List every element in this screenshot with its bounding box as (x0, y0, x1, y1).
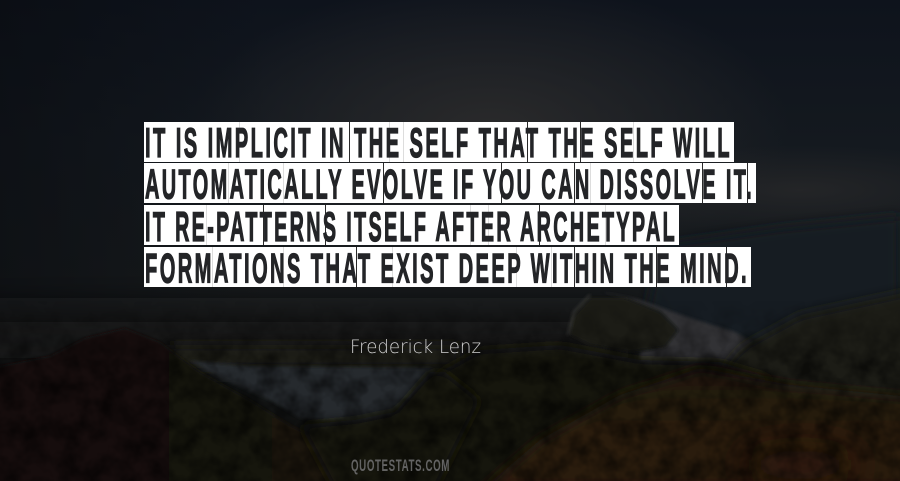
right green hill (700, 285, 900, 430)
left lake (190, 361, 436, 422)
foliage texture (0, 320, 900, 481)
left foreground hill (0, 328, 350, 481)
watermark: QUOTESTATS.COM (351, 457, 450, 475)
thin left arm of river (568, 295, 590, 335)
river bend (598, 291, 752, 361)
author name: Frederick Lenz (350, 336, 481, 358)
quote text block (144, 119, 756, 292)
lower right brown hillside (470, 368, 900, 481)
distant ridge on the left (0, 310, 640, 370)
central dark hill (330, 345, 780, 481)
far shore band (170, 345, 460, 368)
river island (570, 298, 678, 352)
bottom centre shore (300, 372, 480, 481)
distant ridge on the right (640, 216, 900, 345)
